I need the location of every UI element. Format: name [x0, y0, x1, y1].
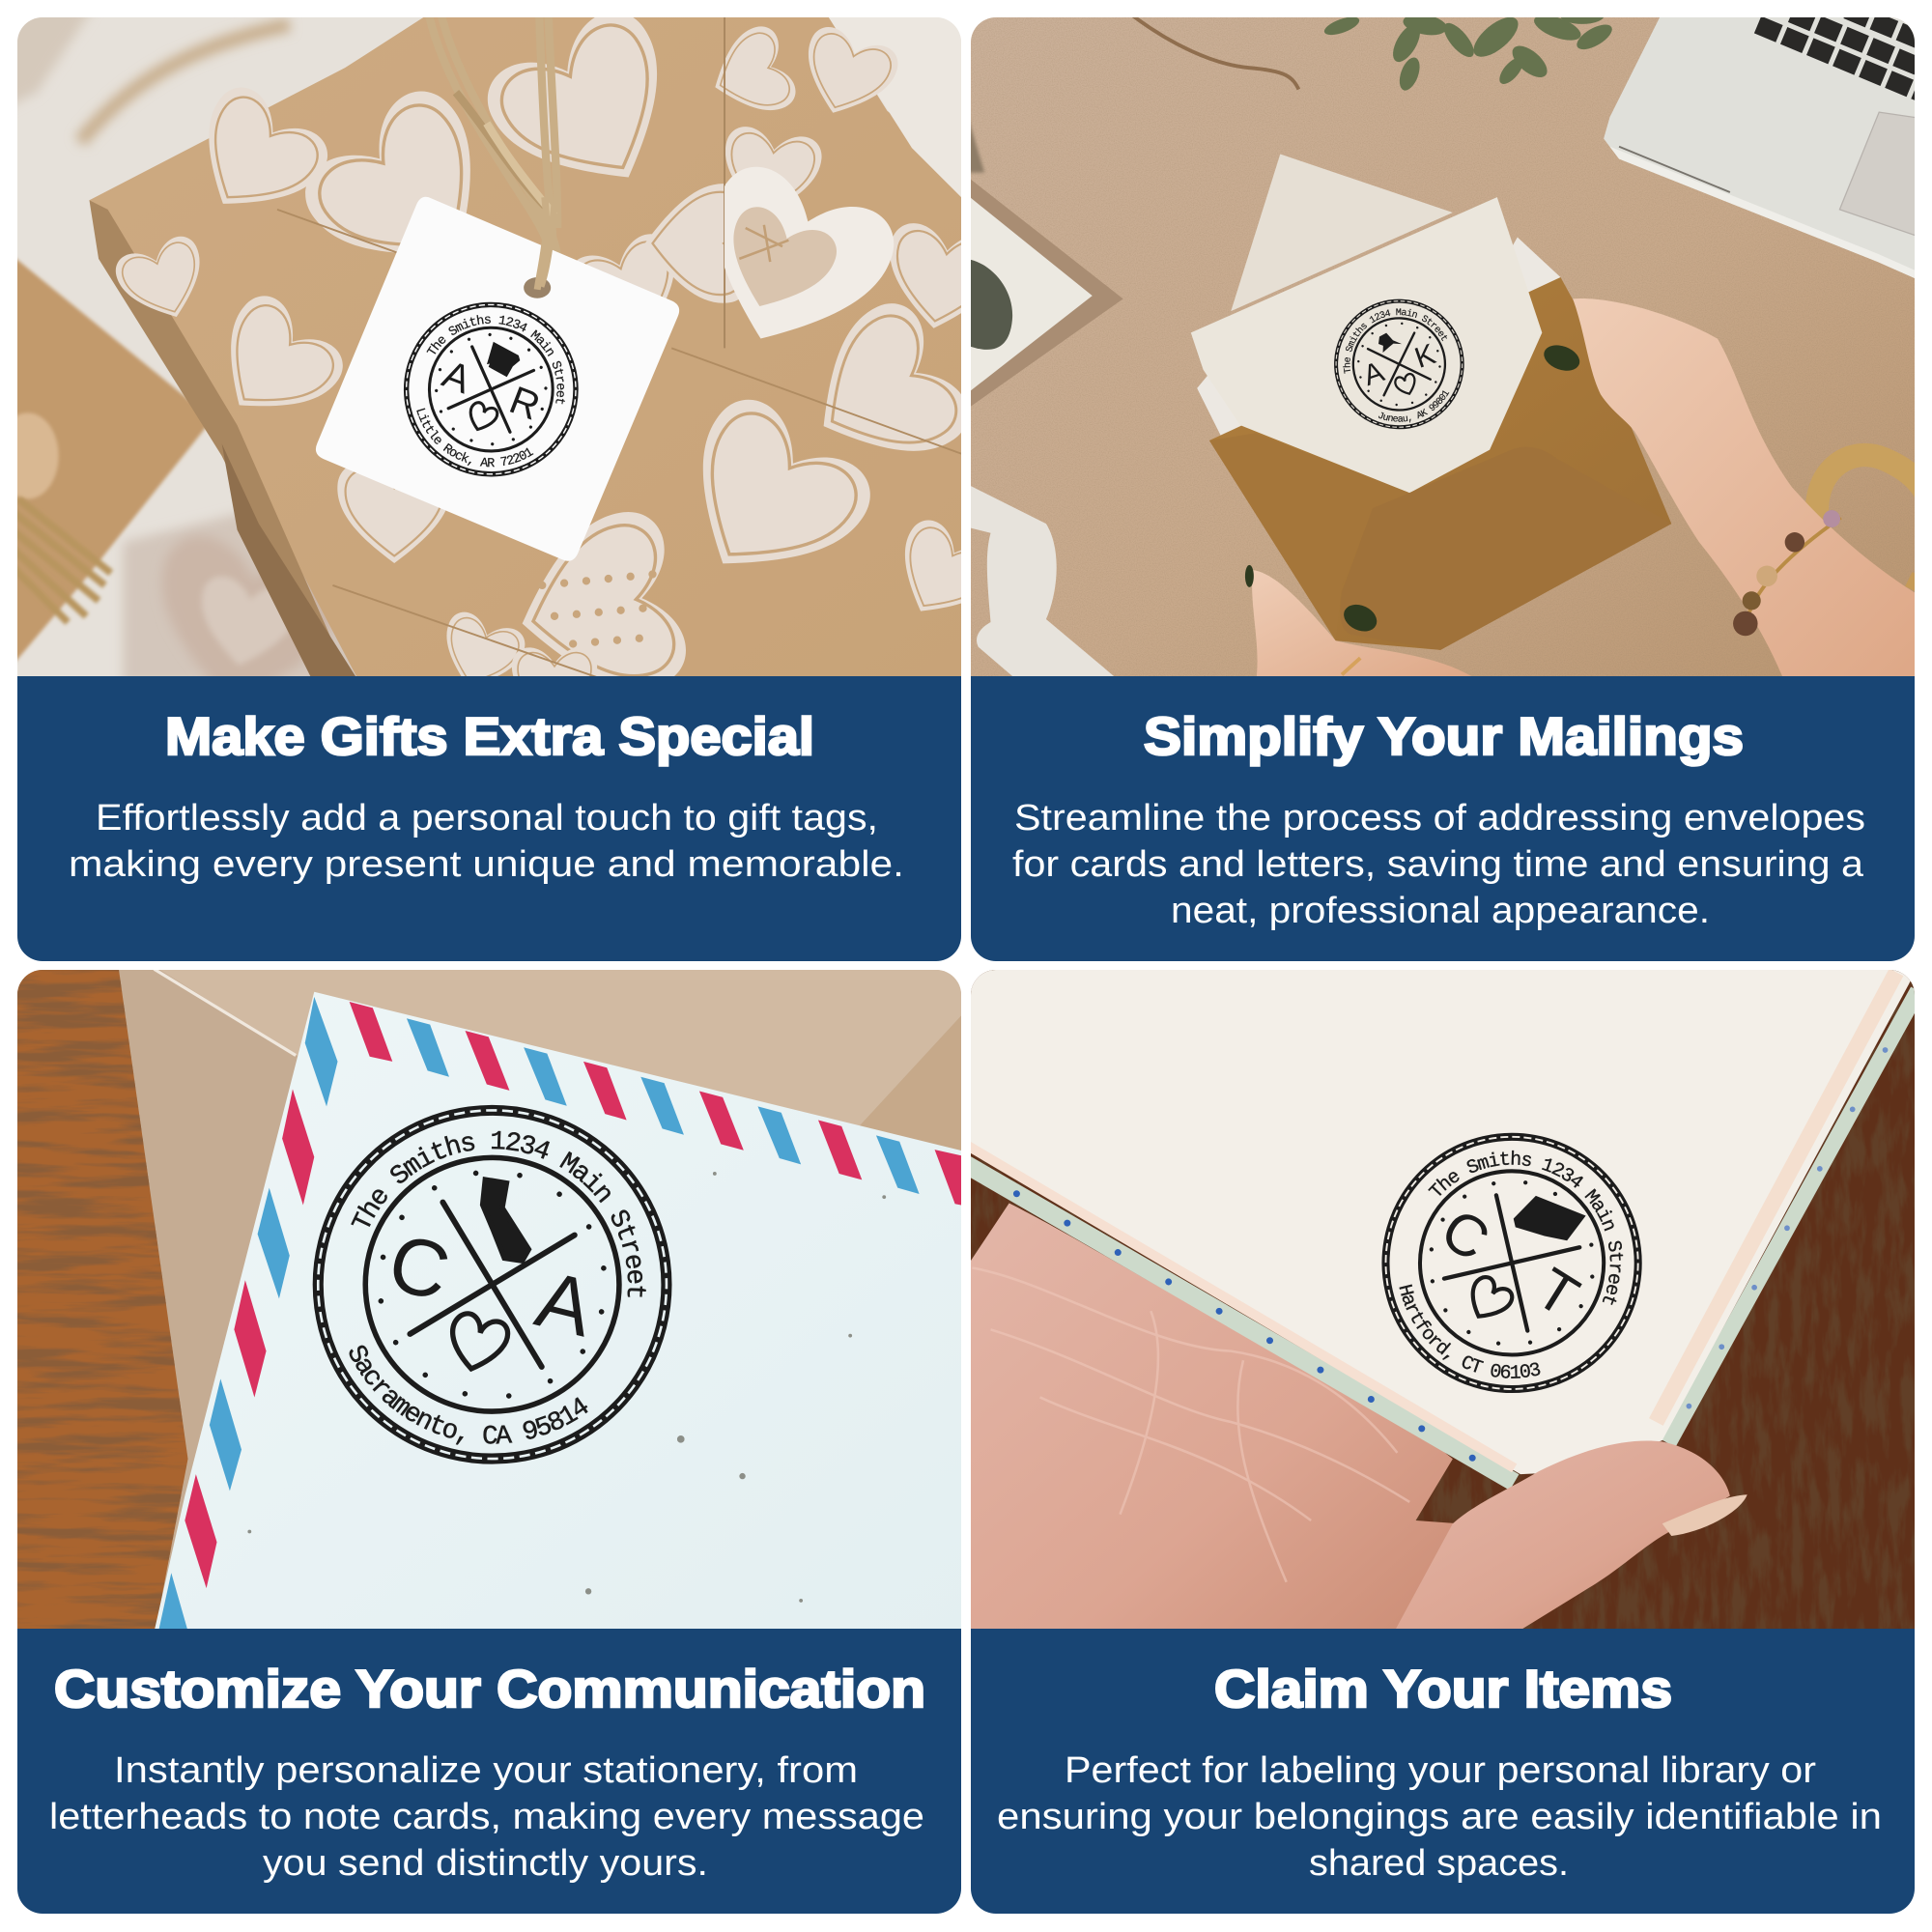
photo: envelope held in hands — [971, 17, 1915, 676]
stamp: Alaska: A — [1359, 355, 1389, 392]
stamp: California: A — [528, 1254, 602, 1354]
description: for cards and letters, saving time and ensuring a — [1012, 844, 1864, 885]
left card — [966, 176, 1123, 410]
stamp: Arkansas: R — [504, 377, 546, 429]
airmail stripes — [157, 997, 967, 1637]
heading: Customize Your Communication — [54, 1659, 925, 1719]
book page — [966, 966, 1918, 1474]
caption band — [971, 1629, 1915, 1914]
stamp: Alaska: Juneau, AK 99801 — [1378, 390, 1449, 423]
letter liner — [1231, 154, 1453, 311]
stamp: Connecticut: C — [1431, 1196, 1501, 1273]
heading: Claim Your Items — [1214, 1659, 1672, 1719]
caption band — [17, 676, 961, 961]
thumb — [1391, 1440, 1730, 1637]
envelope back — [1209, 277, 1671, 650]
letter card — [1191, 197, 1542, 493]
laptop — [1604, 13, 1932, 287]
photo: airmail letter on kraft envelope — [17, 970, 961, 1629]
stamp: Connecticut: The Smiths 1234 Main Street — [1428, 1150, 1623, 1305]
panel: make gifts extra special — [17, 17, 961, 961]
envelope flap — [154, 966, 967, 1129]
wrapping paper hearts — [111, 0, 1008, 723]
ribbon — [971, 486, 1114, 676]
paper heart cutout — [724, 166, 895, 338]
stamp: Alaska: The Smiths 1234 Main Street — [1343, 308, 1447, 374]
description: you send distinctly yours. — [263, 1843, 708, 1884]
description: ensuring your belongings are easily identifiable in — [997, 1797, 1882, 1837]
stamp: Connecticut: Hartford, CT 06103 — [1399, 1285, 1540, 1378]
description: Instantly personalize your stationery, from — [114, 1750, 858, 1791]
panel: customize your communication — [17, 970, 961, 1914]
description: Perfect for labeling your personal library or — [1065, 1750, 1816, 1791]
wood table — [0, 966, 197, 1637]
laptop keys — [1754, 17, 1915, 100]
palm — [966, 1204, 1459, 1637]
stamp: Connecticut: T — [1525, 1255, 1590, 1329]
stamp: California: Sacramento, CA 95814 — [350, 1345, 588, 1445]
description: Streamline the process of addressing envelopes — [1014, 798, 1865, 838]
paper specks — [247, 1172, 886, 1603]
stamp: Arkansas: Little Rock, AR 72201 — [416, 408, 533, 468]
twine — [453, 63, 561, 253]
photo: wrapped gift with tag — [17, 17, 961, 676]
stamp: Arkansas: The Smiths 1234 Main Street — [426, 315, 565, 404]
nails — [1541, 341, 1583, 375]
right hand — [1573, 298, 1932, 684]
heading: Make Gifts Extra Special — [165, 706, 814, 766]
panel: claim your items — [971, 970, 1915, 1914]
description — [49, 1750, 924, 1884]
stamp: California: C — [381, 1217, 458, 1318]
stamp: Alaska — [1334, 299, 1464, 429]
envelope flaps — [1209, 433, 1409, 640]
paper — [153, 992, 967, 1637]
description — [69, 798, 904, 885]
description: Effortlessly add a personal touch to gift tags, — [96, 798, 878, 838]
stamp: Arkansas: A — [437, 352, 477, 402]
caption band — [971, 676, 1915, 961]
description: making every present unique and memorable. — [69, 844, 904, 885]
description: letterheads to note cards, making every message — [49, 1797, 924, 1837]
description: neat, professional appearance. — [1171, 891, 1710, 931]
bottom hand — [1252, 570, 1471, 676]
gold frame — [1817, 455, 1932, 530]
twine and leaves — [1132, 15, 1298, 89]
stamp: Connecticut — [1381, 1132, 1642, 1393]
dots on lower heart — [542, 573, 666, 644]
stamp: Alaska: K — [1410, 338, 1439, 375]
description: shared spaces. — [1309, 1843, 1569, 1884]
stamp: California — [313, 1105, 672, 1464]
thumbnail — [1662, 1494, 1747, 1536]
description — [997, 1750, 1882, 1884]
book edge strips — [966, 1164, 1515, 1482]
stamp: California: The Smiths 1234 Main Street — [351, 1130, 646, 1297]
caption band — [17, 1629, 961, 1914]
bracelet — [1746, 518, 1841, 629]
photo: open book held by hand — [971, 970, 1915, 1629]
description — [1012, 798, 1865, 931]
gift tag — [316, 197, 679, 561]
panel: simplify your mailings — [971, 17, 1915, 961]
stamp: Arkansas — [404, 301, 579, 477]
heading: Simplify Your Mailings — [1144, 706, 1744, 766]
